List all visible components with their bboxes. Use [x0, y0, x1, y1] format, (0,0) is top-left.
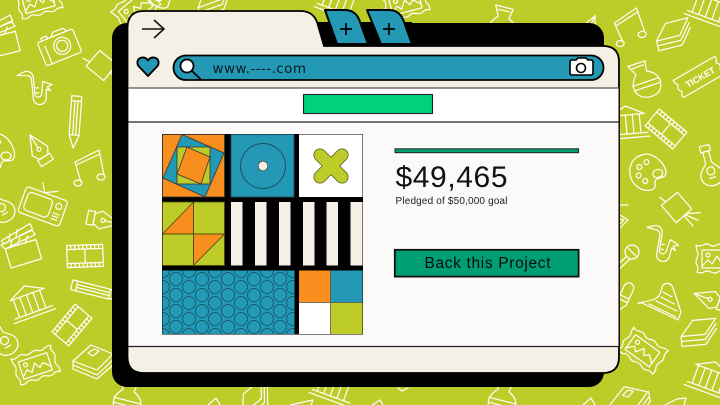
back this project button	[395, 250, 579, 277]
browser window	[128, 11, 619, 373]
icon: ticket: TICKET	[684, 65, 717, 90]
pledged amount: $49,465	[396, 161, 508, 194]
icon: ticket	[673, 56, 720, 98]
cell: triangles	[162, 202, 224, 266]
funding progress bar	[395, 149, 578, 153]
url text: www.----.com	[212, 61, 306, 77]
icon: magnifier	[180, 60, 201, 80]
white banner strip	[128, 88, 618, 122]
cell: target circle	[231, 134, 294, 197]
cell: nested squares	[162, 134, 224, 197]
cell: color quadrants	[299, 270, 362, 334]
green banner bar	[304, 94, 432, 114]
icon: plus	[383, 23, 395, 35]
pledged goal caption: Pledged of $50,000 goal	[396, 196, 508, 207]
cell: lime x	[299, 134, 362, 197]
project image mosaic	[156, 134, 363, 342]
icon: plus	[340, 23, 352, 35]
address bar	[174, 56, 604, 80]
black strip behind tabs	[315, 22, 412, 48]
cell: circle pattern	[162, 270, 294, 334]
cell: stripes	[231, 202, 362, 266]
browser drop shadow	[112, 23, 604, 387]
icon: heart	[137, 58, 159, 76]
icon: camera	[570, 58, 593, 75]
back this project button: Back this Project	[424, 255, 551, 272]
tab: new tab 2	[367, 10, 412, 44]
page content area	[128, 122, 618, 346]
icon: forward arrow	[142, 20, 164, 38]
tab: new tab 1	[325, 10, 368, 44]
